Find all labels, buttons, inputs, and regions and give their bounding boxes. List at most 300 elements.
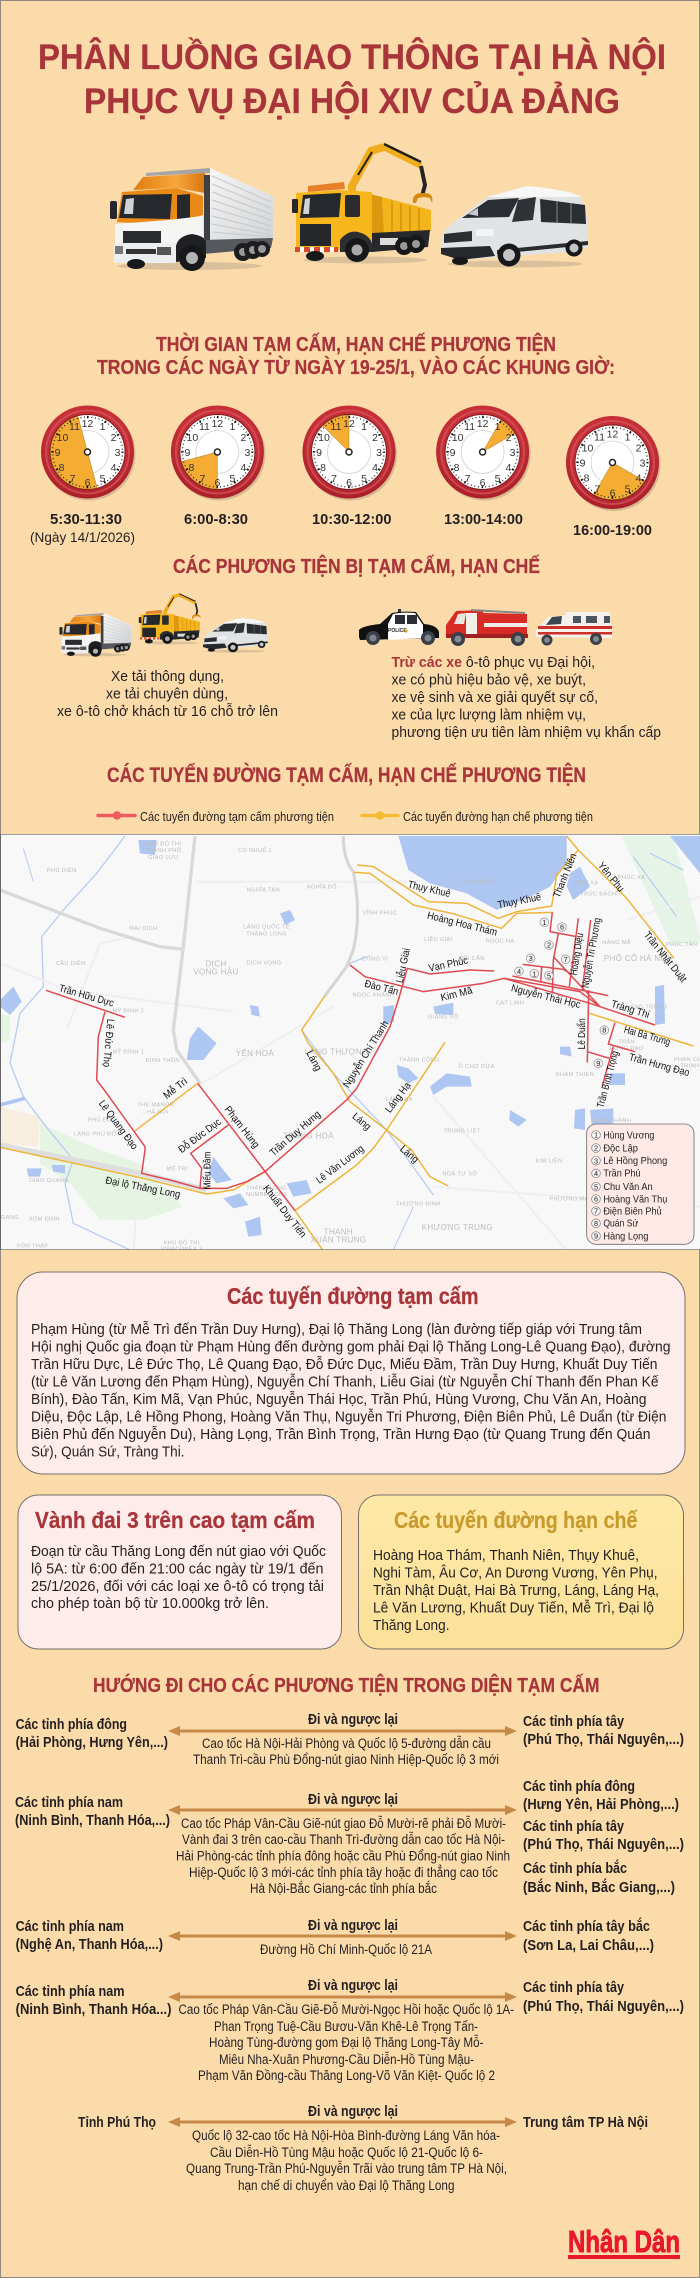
clock: 5:30-11:30: 10 xyxy=(57,432,68,444)
map place names: PHƯƠNG MAI xyxy=(550,1196,591,1202)
map street key box: 5 xyxy=(594,1182,598,1191)
map numbered markers: 1 xyxy=(532,969,536,978)
route 4: Hoàng Tùng-đường gom Đại lộ Thăng Long-Tây Mỗ- xyxy=(209,2035,484,2050)
panel text: ring road 3 xyxy=(31,1544,326,1612)
map street key box: 9 xyxy=(594,1232,598,1241)
clock: 5:30-11:30: 7 xyxy=(70,473,76,485)
arrow: route 3 xyxy=(168,1931,517,1941)
map road labels: Trần Nhật Duật xyxy=(641,929,689,985)
map street key box: 2 xyxy=(594,1144,598,1153)
heading: restriction time xyxy=(97,332,615,379)
map road labels: Khuất Duy Tiến xyxy=(260,1183,309,1240)
map: banned routes (red) xyxy=(46,912,655,1211)
icon: small crane truck xyxy=(139,594,201,644)
map place names: KIM LIÊN xyxy=(536,1156,562,1164)
map road labels xyxy=(58,852,691,1240)
clock: 13:00-14:00: 6 xyxy=(480,477,486,489)
icon: fire truck xyxy=(446,610,528,646)
map place names: KHU ĐÔ THỊ xyxy=(164,1239,200,1246)
map place names: LIỄU GIAI xyxy=(424,936,453,943)
clock: 6:00-8:30: 10 xyxy=(187,432,198,444)
map place names: LÁNG HẠ xyxy=(386,1096,413,1103)
route 1: (Phú Thọ, Thái Nguyên,...) xyxy=(523,1732,684,1748)
route 4 xyxy=(16,1978,684,2083)
map street key box: Quán Sứ xyxy=(603,1219,639,1230)
route 2: Các tỉnh phía nam xyxy=(15,1795,123,1811)
map place names: TRINH xyxy=(681,1063,699,1069)
map place names: XÓM THÁP xyxy=(16,1242,48,1249)
clock time labels: 5:30-11:30 xyxy=(50,511,122,528)
route 3: (Nghệ An, Thanh Hóa,...) xyxy=(16,1937,163,1953)
map road labels: Nguyễn Chí Thanh xyxy=(340,1018,392,1090)
restricted vehicles text: xe ô-tô chở khách từ 16 chỗ trở lên xyxy=(57,703,278,720)
map road labels: Láng xyxy=(397,1144,420,1166)
clock: 10:30-12:00: 7 xyxy=(331,473,337,485)
map place names: THỤY KHUÊ xyxy=(459,878,494,886)
heading: routes: CÁC TUYẾN ĐƯỜNG TẠM CẤM, HẠN CHẾ PHƯƠNG TIỆN xyxy=(107,763,586,787)
clock: 6:00-8:30: 3 xyxy=(244,447,250,459)
clock: 13:00-14:00: 4 xyxy=(506,462,512,474)
clock: 16:00-19:00: 3 xyxy=(640,458,646,470)
icon: large passenger van xyxy=(441,186,588,268)
clock: 5:30-11:30: 1 xyxy=(100,421,106,433)
map place names xyxy=(1,840,700,1253)
panel text: limited routes: Nghi Tàm, Âu Cơ, An Dương Vương, Yên Phụ, xyxy=(373,1564,658,1582)
clock: 13:00-14:00: 5 xyxy=(495,473,501,485)
clock: 6:00-8:30 xyxy=(171,406,265,500)
clock: 10:30-12:00: 2 xyxy=(372,432,378,444)
route 5: Quang Trung-Trần Phú-Nguyễn Trãi vào trung tâm TP Hà Nội, xyxy=(186,2161,507,2176)
clock: 10:30-12:00: 12 xyxy=(343,418,355,430)
map place names: CÁT LINH xyxy=(496,1000,524,1007)
map place names: ĐỘI CẤN xyxy=(459,955,485,962)
route 3: Các tỉnh phía nam xyxy=(16,1919,124,1935)
arrow: route 1 xyxy=(168,1726,517,1736)
map legend: banned routes: Các tuyến đường tạm cấm phương tiện xyxy=(140,809,334,824)
map road labels: Lê Văn Lương xyxy=(315,1143,367,1186)
clock: 6:00-8:30: 11 xyxy=(199,421,210,433)
map numbered markers: 4 xyxy=(517,967,521,976)
map numbered markers: 3 xyxy=(529,954,533,963)
map place names: - HÀ NỘI xyxy=(143,1108,169,1115)
map numbered markers: 9 xyxy=(596,1059,600,1068)
route 4: (Ninh Bình, Thanh Hóa...) xyxy=(16,2002,172,2018)
map road labels: Lê Quang Đạo xyxy=(96,1099,140,1152)
map road labels: Tràng Thi xyxy=(610,999,651,1021)
map road labels: Trần Hữu Dực xyxy=(58,982,115,1010)
route 3: Đi và ngược lại xyxy=(308,1918,398,1934)
map road labels: Trần Duy Hưng xyxy=(267,1108,323,1159)
clock: 5:30-11:30: 9 xyxy=(55,447,61,459)
map street key box: Hàng Lọng xyxy=(603,1231,648,1242)
map place names: THĂNG LONG xyxy=(246,1184,287,1191)
map place names: TRÚC BẠCH xyxy=(580,891,616,898)
map numbered markers: 1 xyxy=(542,918,546,927)
map place names: MAI DỊCH xyxy=(129,926,157,932)
map place names: HÀNG MÃ xyxy=(602,939,631,946)
route 1: Cao tốc Hà Nội-Hải Phòng và Quốc lộ 5-đường dẫn cầu xyxy=(202,1736,491,1751)
clock time labels: 16:00-19:00 xyxy=(573,522,652,539)
map place names: THANH xyxy=(324,1227,353,1236)
map: limited routes (yellow) xyxy=(0,836,693,1250)
map place names: MỸ ĐÌNH 2 xyxy=(113,1007,144,1014)
panel text: banned routes: Bính), Đào Tấn, Kim Mã, Vạn Phúc, Nguyễn Thái Học, Trần Phú, Hùng Vương, Chu Văn An, Hoàng xyxy=(31,1391,646,1408)
clock: 16:00-19:00 xyxy=(566,416,660,511)
route 2: Cao tốc Pháp Vân-Cầu Giẽ-nút giao Đỗ Mười-rẽ phải Đỗ Mười- xyxy=(181,1816,506,1831)
map place names: MỸ ĐÌNH 1 xyxy=(113,1048,144,1055)
map place names: PHÚC TÂN xyxy=(666,941,697,948)
panel text: banned routes xyxy=(31,1321,670,1460)
panel text: banned routes: Phạm Hùng (từ Mễ Trì đến Trần Duy Hưng), Đại lộ Thăng Long (làn đường tiếp giáp với Trung tâm xyxy=(31,1321,642,1338)
route 1: (Hải Phòng, Hưng Yên,...) xyxy=(16,1735,168,1751)
route 4: Các tỉnh phía nam xyxy=(16,1984,125,2000)
clock: 6:00-8:30: 5 xyxy=(229,473,235,485)
map place names: THÀNH CÔNG xyxy=(399,1057,440,1064)
panel: banned routes xyxy=(17,1272,685,1474)
map place names: NGÃ TƯ SỞ xyxy=(442,1171,478,1178)
route 3 xyxy=(16,1917,654,1957)
route 2: Hải Phòng-các tỉnh phía đông hoặc cầu Phù Đổng-nút giao Ninh xyxy=(176,1848,510,1864)
route 2 xyxy=(15,1779,684,1896)
heading: restriction time: THỜI GIAN TẠM CẤM, HẠN CHẾ PHƯƠNG TIỆN xyxy=(156,332,556,356)
map place names: LÀNG PHÚ ĐÔ xyxy=(74,1131,117,1138)
map road labels: Miếu Đầm xyxy=(202,1152,214,1189)
icon: large box truck xyxy=(110,168,273,271)
title: PHỤC VỤ ĐẠI HỘI XIV CỦA ĐẢNG xyxy=(84,81,620,121)
map road labels: Yên Phụ xyxy=(595,861,626,895)
route 5: hạn chế di chuyển vào Đại lộ Thăng Long xyxy=(238,2178,454,2193)
map road labels: Trần Bình Trọng xyxy=(595,1049,621,1109)
route 4: Miêu Nha-Xuân Phương-Cầu Diễn-Hồ Tùng Mậu- xyxy=(219,2052,474,2067)
heading: alternate directions: HƯỚNG ĐI CHO CÁC PHƯƠNG TIỆN TRONG DIỆN TẠM CẤM xyxy=(93,1673,600,1697)
icon: large crane truck xyxy=(292,144,432,264)
panel: ring road 3 xyxy=(18,1495,342,1649)
clock: 13:00-14:00: 2 xyxy=(506,432,512,444)
clock: 5:30-11:30: 6 xyxy=(85,477,91,489)
route 4: Đi và ngược lại xyxy=(308,1978,398,1994)
clock: 13:00-14:00: 8 xyxy=(454,462,460,474)
clock: 5:30-11:30: 5 xyxy=(100,473,106,485)
icon: police car xyxy=(359,609,439,645)
clock: 6:00-8:30: 1 xyxy=(229,421,235,433)
map street key box: Chu Văn An xyxy=(603,1182,653,1193)
panel text: ring road 3: Đoạn từ cầu Thăng Long đến nút giao với Quốc xyxy=(31,1544,326,1560)
clock: 10:30-12:00: 9 xyxy=(316,447,322,459)
clock: 5:30-11:30: 2 xyxy=(111,432,117,444)
arrow: route 5 xyxy=(168,2117,517,2127)
map place names: YÊN HOÀ xyxy=(236,1049,274,1058)
clock: 10:30-12:00: 1 xyxy=(361,421,367,433)
map road labels: Hoàng Hoa Thám xyxy=(426,911,498,939)
map place names: THE MANOR xyxy=(137,1102,174,1108)
route 4: Phạm Văn Đồng-cầu Thăng Long-Võ Văn Kiệt- Quốc lộ 2 xyxy=(198,2068,495,2083)
map place names: NGỌC KHÁNH xyxy=(352,991,394,998)
map place names: TRẦN xyxy=(618,1039,635,1046)
route 2: (Phú Thọ, Thái Nguyên,...) xyxy=(523,1837,684,1853)
map place names: TRUNG LIỆT xyxy=(444,1127,481,1135)
restricted vehicles text xyxy=(57,669,278,720)
map place names: LÀNG QUỐC TẾ xyxy=(243,924,290,931)
route 1: Đi và ngược lại xyxy=(308,1712,398,1728)
clock: 10:30-12:00 xyxy=(302,406,397,500)
map place names: DỊCH VỌNG xyxy=(246,960,282,966)
clock: 13:00-14:00: 11 xyxy=(464,421,475,433)
map street key box: 4 xyxy=(594,1169,598,1178)
title: PHÂN LUỒNG GIAO THÔNG TẠI HÀ NỘI xyxy=(38,37,666,77)
panel heading: limited routes: Các tuyến đường hạn chế xyxy=(394,1507,638,1533)
route 2: Vành đai 3 trên cao-cầu Thanh Trì-đường dẫn cao tốc Hà Nội- xyxy=(182,1832,505,1847)
clock: 6:00-8:30: 8 xyxy=(188,462,194,474)
map road labels: Lê Duẩn xyxy=(576,1018,588,1049)
map street key box: Hùng Vương xyxy=(603,1130,654,1141)
route 3: Các tỉnh phía tây bắc xyxy=(523,1917,650,1935)
route 1: Thanh Trì-cầu Phù Đổng-nút giao Ninh Hiệp-Quốc lộ 3 mới xyxy=(193,1752,499,1767)
map place names: VỌNG HẬU xyxy=(193,967,239,976)
route 2: Các tỉnh phía tây xyxy=(523,1819,624,1835)
route 1: Các tỉnh phía đông xyxy=(16,1717,127,1733)
arrow: route 4 xyxy=(168,1992,517,2002)
route 2: (Ninh Bình, Thanh Hóa,...) xyxy=(15,1813,170,1829)
map place names: LÊ ĐẠI HÀNH xyxy=(592,1116,631,1124)
panel text: banned routes: Sứ), Quán Sứ, Tràng Thi. xyxy=(31,1444,184,1460)
route 5: Trung tâm TP Hà Nội xyxy=(523,2115,648,2131)
clock: 10:30-12:00: 5 xyxy=(361,473,367,485)
map place names: THƯỢNG ĐÌNH xyxy=(396,1200,441,1207)
clock: 5:30-11:30: 11 xyxy=(69,421,80,433)
heading: restricted vehicles: CÁC PHƯƠNG TIỆN BỊ TẠM CẤM, HẠN CHẾ xyxy=(173,554,540,578)
map place names: XÓM ĐÌNH xyxy=(29,1216,60,1223)
map road labels: Láng xyxy=(350,1111,373,1133)
map street key box xyxy=(587,1124,694,1244)
map place names: Ô CHỢ DỪA xyxy=(459,1063,495,1070)
route 2: Các tỉnh phía đông xyxy=(523,1779,635,1795)
route 1: Các tỉnh phía tây xyxy=(523,1714,624,1730)
clock: 6:00-8:30: 2 xyxy=(240,432,246,444)
map road labels: Láng xyxy=(303,1049,323,1073)
map road labels: Láng Hạ xyxy=(384,1080,414,1115)
panel heading: banned routes: Các tuyến đường tạm cấm xyxy=(227,1283,478,1309)
map place names: HƯNG ĐẠO xyxy=(610,1046,644,1052)
panel text: ring road 3: lộ 5A: từ 6:00 đến 21:00 các ngày từ 19/1 đến xyxy=(31,1562,324,1578)
route 2: (Bắc Ninh, Bắc Giang,...) xyxy=(523,1878,675,1896)
route 5: Quốc lộ 32-cao tốc Hà Nội-Hòa Bình-đường Láng Văn hóa- xyxy=(192,2128,500,2143)
restricted vehicles text: Xe tải thông dụng, xyxy=(111,669,224,685)
clock: 10:30-12:00: 8 xyxy=(320,462,326,474)
map place names: VINACONEX 3 xyxy=(161,1247,203,1253)
map street key box: Hoàng Văn Thụ xyxy=(603,1194,667,1205)
map place names: TRUNG HOÀ xyxy=(283,1131,334,1140)
map place names: NUMBER ONE xyxy=(246,1192,288,1198)
clock: 6:00-8:30: 12 xyxy=(212,418,223,430)
exempt vehicles text: xe của lực lượng làm nhiệm vụ, xyxy=(392,708,586,724)
map road labels: Kim Mã xyxy=(440,985,474,1004)
clock: 10:30-12:00: 6 xyxy=(346,477,352,489)
clock time labels xyxy=(30,511,652,545)
panel text: banned routes: Diệu, Độc Lập, Lê Hồng Phong, Hoàng Văn Thụ, Nguyễn Tri Phương, Điện Biên Phủ, Lê Duẩn (từ Điện xyxy=(31,1408,666,1426)
panel text: banned routes: Biên Phủ đến Nguyễn Du), Hàng Lọng, Trần Bình Trọng, Trần Hưng Đạo (từ Quang Trung đến Quán xyxy=(31,1426,650,1443)
map road labels: Hoàng Diệu xyxy=(569,932,586,976)
clock: 16:00-19:00: 4 xyxy=(636,472,642,484)
exempt vehicles text: xe có phù hiệu bảo vệ, xe buýt, xyxy=(392,672,586,688)
map place names: KHƯƠNG TRUNG xyxy=(422,1223,493,1232)
map base: parks, water, highways xyxy=(0,836,700,1250)
clock time labels: 10:30-12:00 xyxy=(312,511,392,528)
clock: 16:00-19:00: 6 xyxy=(610,488,616,500)
icon: small van xyxy=(203,618,268,653)
map road labels: Trần Hưng Đạo xyxy=(628,1051,691,1079)
map road labels: Thụy Khuê xyxy=(407,880,452,900)
clock: 16:00-19:00: 8 xyxy=(584,472,590,484)
restricted vehicles text: xe tải chuyên dùng, xyxy=(106,686,228,702)
route 2: Hà Nội-Bắc Giang-các tỉnh phía bắc xyxy=(250,1881,437,1896)
map place names: MỄ TRÌ xyxy=(167,1165,188,1172)
panel text: limited routes: Lê Văn Lương, Khuất Duy Tiến, Mễ Trì, Đại lộ xyxy=(373,1600,654,1616)
map place names: THÀNH PHỐ xyxy=(145,847,182,854)
clock: 5:30-11:30 xyxy=(41,406,136,500)
clock: 6:00-8:30: 4 xyxy=(240,462,246,474)
map road labels: Liễu Giai xyxy=(393,947,413,984)
route 5: Cầu Diễn-Hồ Tùng Mậu hoặc Quốc lộ 21-Quốc lộ 6- xyxy=(210,2145,483,2160)
panel text: banned routes: Trần Hữu Dực, Lê Đức Thọ, Lê Quang Đạo, Đỗ Đức Dục, Miếu Đầm, Trần Duy Hưng, Khuất Duy Tiến xyxy=(31,1356,658,1373)
route 5: Tỉnh Phú Thọ xyxy=(78,2115,156,2131)
clock: 13:00-14:00: 7 xyxy=(465,473,471,485)
route 4: (Phú Thọ, Thái Nguyên,...) xyxy=(523,1999,684,2015)
map place names: THĂNG LONG xyxy=(246,930,287,937)
map place names: LÁNG THƯỢNG xyxy=(305,1047,369,1056)
clock: 5:30-11:30: 3 xyxy=(115,447,121,459)
clock: 6:00-8:30: 6 xyxy=(214,477,220,489)
clock: 16:00-19:00: 2 xyxy=(636,442,642,454)
clock: 13:00-14:00 xyxy=(436,406,531,500)
clock: 6:00-8:30: 7 xyxy=(199,473,205,485)
exempt vehicles text: phương tiện ưu tiên làm nhiệm vụ khẩn cấp xyxy=(392,725,661,741)
clock: 13:00-14:00: 12 xyxy=(477,418,489,430)
map road labels: Thanh Niên xyxy=(552,852,580,899)
route 4: Các tỉnh phía tây xyxy=(523,1980,624,1996)
clock: 16:00-19:00: 9 xyxy=(580,458,586,470)
map road labels: Lê Đức Thọ xyxy=(100,1018,115,1068)
map place names: CẦU DIỄN xyxy=(56,960,86,967)
clock time labels: 6:00-8:30 xyxy=(184,511,248,528)
map place names: KHÂM THIÊN xyxy=(556,1070,594,1078)
map road labels: Đỗ Đức Dục xyxy=(176,1115,223,1156)
map numbered markers: 8 xyxy=(602,1026,606,1035)
heading: restriction time: TRONG CÁC NGÀY TỪ NGÀY 19-25/1, VÀO CÁC KHUNG GIỜ: xyxy=(97,355,615,379)
route 5 xyxy=(78,2104,648,2193)
route 3: (Sơn La, Lai Châu,...) xyxy=(523,1938,654,1954)
map road labels: Thụy Khuê xyxy=(497,892,542,911)
map place names: PHỐ CỔ HÀ NỘI xyxy=(604,953,669,963)
clock: 10:30-12:00: 3 xyxy=(376,447,382,459)
clock: 16:00-19:00: 11 xyxy=(594,432,605,444)
route 2: Hiệp-Quốc lộ 3 mới-các tỉnh phía tây hoặc đi thẳng cao tốc xyxy=(189,1865,498,1880)
map numbered markers: 6 xyxy=(560,923,564,932)
clock: 6:00-8:30: 9 xyxy=(184,447,190,459)
route 4: Cao tốc Pháp Vân-Cầu Giẽ-Đỗ Mười-Ngọc Hồi hoặc Quốc lộ 1A- xyxy=(178,2002,514,2017)
map street key box: Trần Phú xyxy=(603,1169,641,1180)
panel text: banned routes: (từ Lê Văn Lương đến Phạm Hùng), Nguyễn Chí Thanh, Liễu Giai (từ Nguyễn Chí Thanh đến Phan Kế xyxy=(31,1374,658,1390)
map place names: KHU ĐÔ THỊ xyxy=(145,840,181,847)
map place names: GIAO LƯU xyxy=(148,855,179,861)
clock: 13:00-14:00: 1 xyxy=(495,421,501,433)
clock: 13:00-14:00: 9 xyxy=(450,447,456,459)
title xyxy=(38,37,666,121)
route 2: (Hưng Yên, Hải Phòng,...) xyxy=(523,1797,679,1813)
clock: 5:30-11:30: 8 xyxy=(59,462,65,474)
clock: 16:00-19:00: 1 xyxy=(625,432,631,444)
panel text: banned routes: Hội nghị Quốc gia đoạn từ Phạm Hùng đến đường gom phải Đại lộ Thăng Long-Lê Quang Đạo), đường xyxy=(31,1340,670,1356)
map street key box: Lê Hồng Phong xyxy=(603,1156,667,1167)
map place names: CÓ NHUẾ 1 xyxy=(238,847,272,854)
clock: 16:00-19:00: 10 xyxy=(582,442,593,454)
map road labels: Vạn Phúc xyxy=(428,956,469,975)
map place names: VĨNH PHÚC xyxy=(363,910,397,917)
map place names: CỐNG VỊ xyxy=(362,955,388,962)
map numbered markers: 7 xyxy=(564,955,568,964)
map street key box: 1 xyxy=(594,1131,598,1140)
route 3: Đường Hồ Chí Minh-Quốc lộ 21A xyxy=(260,1942,432,1957)
exempt vehicles text: Trừ các xe ô-tô phục vụ Đại hội, xyxy=(392,655,595,671)
map place names: HÀNG TRỐNG xyxy=(626,1003,667,1010)
clock: 16:00-19:00: 5 xyxy=(625,484,631,496)
map road labels: Nguyễn Tri Phương xyxy=(578,916,604,989)
panel: limited routes xyxy=(358,1495,684,1649)
map street key box: 6 xyxy=(594,1195,598,1204)
clock: 16:00-19:00: 12 xyxy=(607,428,618,440)
map place names: PHÚ ĐÔ xyxy=(88,1117,112,1124)
map place names: GANG xyxy=(1,1215,19,1221)
route 2: Các tỉnh phía bắc xyxy=(523,1859,627,1877)
clock time labels: 13:00-14:00 xyxy=(444,511,523,528)
route 2: Đi và ngược lại xyxy=(308,1792,398,1808)
map road labels: Mễ Trì xyxy=(161,1075,190,1102)
map place names: NGHĨA TÂN xyxy=(247,886,280,893)
panel text: ring road 3: cho phép toàn bộ từ 10.000kg trở lên. xyxy=(31,1596,269,1612)
map place names: GIAO QUANG xyxy=(29,1178,69,1184)
map street key box: Độc Lập xyxy=(603,1143,638,1154)
map road labels: Phạm Hùng xyxy=(222,1104,261,1151)
map street key box: 8 xyxy=(594,1219,598,1228)
clock: 5:30-11:30: 4 xyxy=(111,462,117,474)
route 4: Phan Trọng Tuệ-Cầu Bươu-Văn Khê-Lê Trọng Tấn- xyxy=(214,2019,478,2034)
exempt vehicles text: xe vệ sinh và xe giải quyết sự cố, xyxy=(392,690,598,706)
map place names: NGỌC HÀ xyxy=(486,937,514,944)
map numbered markers: 2 xyxy=(547,941,551,950)
panel text: limited routes: Thăng Long. xyxy=(373,1618,450,1634)
map street key box: 3 xyxy=(594,1156,598,1165)
map numbered markers: 5 xyxy=(547,971,551,980)
clock: 10:30-12:00: 11 xyxy=(331,421,342,433)
icon: ambulance xyxy=(536,612,612,646)
route 5: Đi và ngược lại xyxy=(308,2104,398,2120)
panel heading: ring road 3: Vành đai 3 trên cao tạm cấm xyxy=(35,1507,315,1533)
panel text: ring road 3: 25/1/2026, đối với các loại xe ô-tô có trọng tải xyxy=(31,1579,324,1595)
map place names: PHÚ DIỄN xyxy=(47,867,77,874)
map road labels: Nguyễn Thái Học xyxy=(510,981,582,1011)
clock time labels: (Ngày 14/1/2026) xyxy=(30,530,135,545)
clock: 16:00-19:00: 7 xyxy=(595,484,601,496)
clock: 10:30-12:00: 10 xyxy=(318,432,330,444)
map numbered markers xyxy=(515,918,609,1068)
map xyxy=(0,834,700,1253)
map street key box: Điện Biên Phủ xyxy=(603,1206,662,1217)
panel text: limited routes: Hoàng Hoa Thám, Thanh Niên, Thụy Khuê, xyxy=(373,1548,639,1564)
map place names: GIẢNG VÕ xyxy=(428,1014,459,1021)
map road labels: Đại lộ Thăng Long xyxy=(104,1175,181,1201)
route 1 xyxy=(16,1712,684,1767)
clock: 5:30-11:30: 12 xyxy=(82,418,93,430)
icon: small box truck xyxy=(59,613,131,657)
